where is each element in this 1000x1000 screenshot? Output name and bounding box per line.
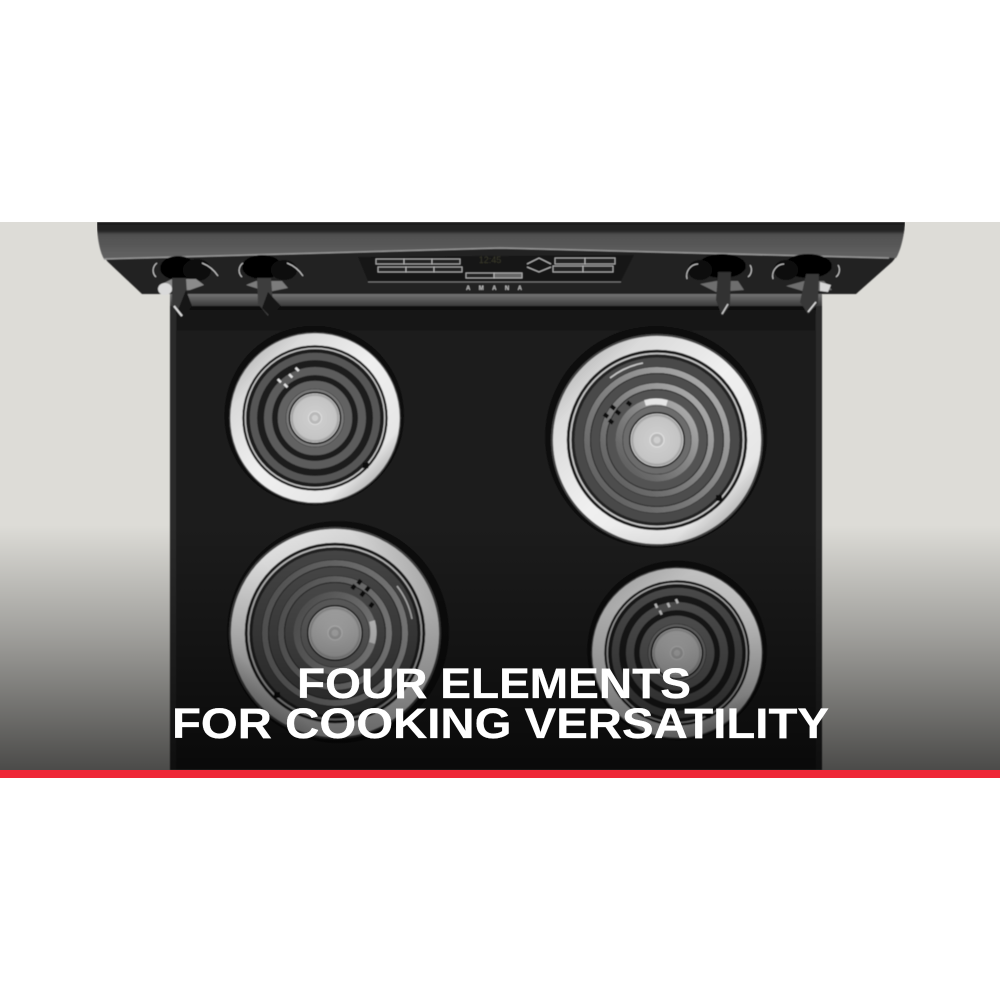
panel buttons left — [376, 259, 522, 278]
up and down arrows — [527, 258, 551, 272]
backguard — [97, 222, 905, 294]
clock display: 12:45 — [479, 255, 501, 265]
red bar — [0, 770, 1000, 778]
cooktop surface — [170, 300, 822, 770]
knob far right — [773, 254, 839, 314]
cooktop front lip — [170, 294, 822, 306]
knob right — [687, 254, 751, 316]
bottom fade — [0, 525, 1000, 770]
title: FOR COOKING VERSATILITY — [172, 700, 829, 748]
range seen from above — [97, 222, 905, 770]
panel buttons right — [553, 258, 615, 272]
title: FOUR ELEMENTS — [297, 660, 691, 708]
brand name: AMANA — [466, 286, 523, 292]
burner: front right — [562, 535, 792, 766]
backdrop band — [0, 222, 1000, 770]
knob left — [239, 255, 303, 316]
burner: front left — [227, 521, 449, 743]
title — [172, 660, 829, 748]
burner: rear right — [545, 326, 767, 548]
knob far left — [153, 256, 218, 316]
burner: rear left — [224, 326, 404, 505]
control panel — [358, 255, 634, 292]
